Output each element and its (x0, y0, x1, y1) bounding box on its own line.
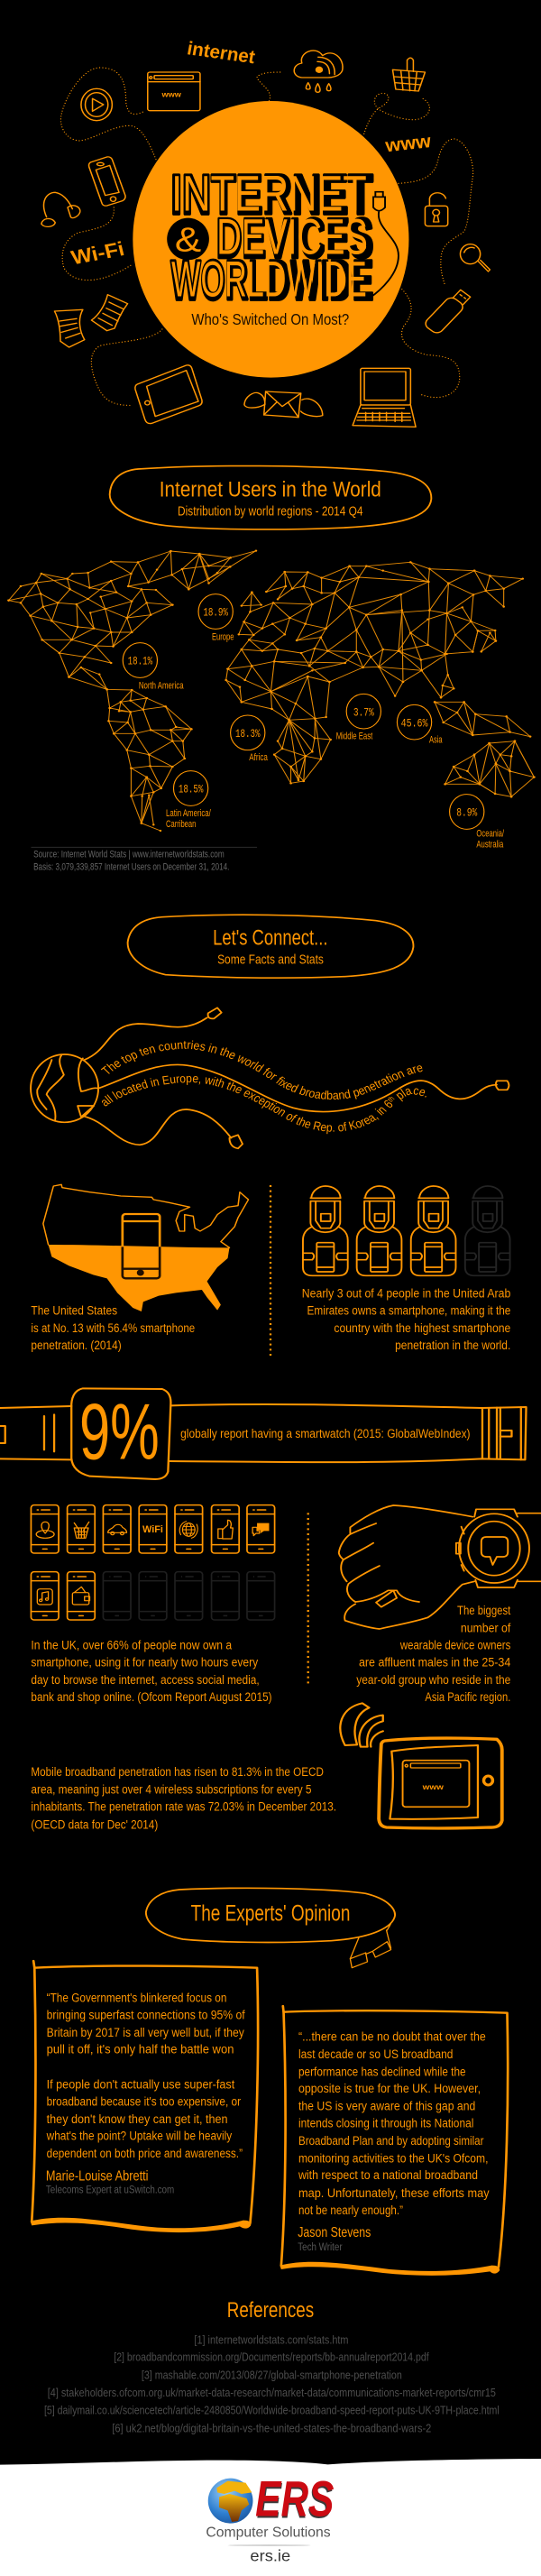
stat: Asia (397, 704, 443, 745)
quote panel: Jason Stevens: “...there can be no doubt that over the (298, 2030, 486, 2044)
phone grid: active phones (31, 1505, 275, 1620)
source note: Source: Internet World Stats | www.internetworldstats.com (33, 848, 225, 860)
stat: Africa: Africa (249, 751, 268, 763)
phone icon: chat (252, 1523, 269, 1536)
references list (44, 2333, 500, 2434)
quote panel: Jason Stevens (280, 2006, 508, 2276)
references list: [6] uk2.net/blog/digital-britain-vs-the-united-states-the-broadband-wars-2 (112, 2422, 431, 2434)
US fact text: is at No. 13 with 56.4% smartphone (31, 1321, 195, 1336)
quote panel: Jason Stevens: opposite is true for the UK. However, (298, 2082, 481, 2096)
stat: Middle East: 3.7% (353, 707, 374, 720)
stat: Asia: 45.6% (401, 718, 428, 731)
icon: browser window: www (160, 90, 181, 98)
icon: wifi tablet (340, 1703, 502, 1828)
icon: browser window (148, 72, 200, 111)
source note (31, 847, 257, 872)
wearable fact text (356, 1604, 511, 1705)
stat: Oceania: Oceania/ (476, 827, 504, 839)
quote panel: Jason Stevens: map. Unfortunately, these efforts may (298, 2186, 490, 2201)
phone icon: thumbs up (218, 1520, 233, 1539)
smartwatch strap 9%: 9% (79, 1388, 160, 1477)
title: Internet & Devices Worldwide: DEVICES (216, 208, 373, 270)
quote panel: Marie-Louise Abretti: Telecoms Expert at uSwitch.com (46, 2184, 174, 2195)
US fact text: penetration. (2014) (31, 1339, 122, 1353)
quote panel: Jason Stevens: with respect to a national broadband (298, 2168, 478, 2183)
white footer band (0, 2459, 541, 2576)
curved fact text: th (388, 1097, 395, 1102)
heading pill: experts' opinion (146, 1888, 395, 1942)
map: Eurasia (239, 562, 523, 697)
stat: Asia: Asia (429, 733, 443, 745)
UK fact text: day to browse the internet, access social media, (31, 1673, 260, 1688)
quote panel: Jason Stevens: Tech Writer (298, 2240, 343, 2253)
icon: smartphone (89, 157, 125, 206)
US fact text (31, 1304, 195, 1353)
heading pill: let's connect: Some Facts and Stats (217, 952, 324, 967)
icon row: UAE figures (303, 1186, 510, 1275)
hero section (41, 38, 490, 427)
references list: [3] mashable.com/2013/08/27/global-smartphone-penetration (142, 2369, 402, 2381)
UK fact text: In the UK, over 66% of people now own a (31, 1638, 233, 1652)
icon: rss cloud (294, 51, 343, 92)
stat: Africa (231, 715, 268, 763)
icon: magnifier (460, 244, 490, 271)
label: internet: internet (186, 38, 257, 68)
quote panel: Jason Stevens: performance has declined while the (298, 2065, 466, 2079)
logo: ERS wordmark: ERS (257, 2471, 333, 2528)
heading pill: internet users: Distribution by world regions - 2014 Q4 (178, 505, 363, 519)
heading pill: internet users: Internet Users in the World (160, 478, 381, 501)
title: Internet & Devices Worldwide: INTERNET (170, 164, 373, 226)
references and footer (0, 2299, 541, 2576)
icon: shopping basket (392, 58, 425, 91)
quote panel: Marie-Louise Abretti: bringing superfast connections to 95% of (47, 2009, 245, 2022)
logo: ERS globe (208, 2479, 252, 2524)
stat: Middle East (336, 694, 381, 741)
icon: globe with cables (31, 1007, 509, 1148)
icon: usb stick (423, 288, 472, 336)
icon: tablet (135, 365, 202, 424)
stat: North America: 18.1% (128, 656, 153, 668)
orange circle (133, 101, 408, 378)
heading pill: let's connect (128, 915, 413, 978)
experts section (31, 1888, 508, 2276)
icon: laptop (353, 368, 416, 427)
facts section (30, 914, 510, 1356)
quote panel: Jason Stevens: the US is very aware of this gap and (298, 2099, 475, 2113)
icon: headphones (41, 192, 80, 226)
phone icon: music (37, 1589, 52, 1605)
quote panel: Marie-Louise Abretti (31, 1961, 258, 2232)
quote panel: Marie-Louise Abretti: Marie-Louise Abretti (46, 2168, 149, 2184)
map: South America (107, 689, 191, 831)
logo: ERS wordmark (255, 2470, 334, 2528)
title: Internet & Devices Worldwide: DEVICES (216, 208, 368, 265)
label: www: www (383, 130, 433, 156)
phone icon: car (108, 1524, 126, 1535)
icon: wifi tablet: www (422, 1783, 445, 1791)
stat: Europe (198, 594, 234, 642)
curved fact text: place. (396, 1088, 426, 1102)
phone icon: location pin (36, 1522, 54, 1538)
map: Africa (226, 649, 363, 783)
UK fact text: smartphone, using it for nearly two hours every (31, 1656, 259, 1670)
references heading: References (227, 2299, 314, 2323)
heading pill: internet users (110, 466, 431, 529)
map: North America (9, 551, 256, 689)
phone grid: inactive phones (103, 1572, 275, 1620)
quote panel: Marie-Louise Abretti: what's the point? Uptake will be heavily (46, 2130, 233, 2143)
quote panel: Marie-Louise Abretti: Britain by 2017 is all very well but, if they (47, 2026, 244, 2040)
subtitle: Who's Switched On Most? (191, 310, 349, 329)
quote panel: Marie-Louise Abretti: pull it off, it's only half the battle won (47, 2043, 234, 2056)
title: Internet & Devices Worldwide (167, 164, 373, 312)
mobile broadband text: Mobile broadband penetration has risen to 81.3% in the OECD (31, 1765, 324, 1780)
phone icon: wifi: WiFi (142, 1523, 163, 1535)
mobile broadband text (31, 1765, 336, 1832)
icon: play button (81, 88, 112, 121)
quote panel: Marie-Louise Abretti: broadband because it's too expensive, or (47, 2095, 241, 2109)
stat: North America: North America (139, 679, 184, 691)
logo: Computer Solutions: Computer Solutions (206, 2525, 331, 2540)
dotted divider (306, 1513, 311, 1686)
stat: Africa: 18.3% (235, 729, 261, 741)
dotted divider (268, 1185, 273, 1357)
logo divider (228, 2544, 310, 2546)
world map section (9, 466, 534, 872)
phone icon: wallet (72, 1587, 89, 1605)
heading pill: experts' opinion: The Experts' Opinion (191, 1900, 350, 1926)
quote panel: Jason Stevens: last decade or so US broadband (298, 2047, 453, 2062)
icon: papers (54, 295, 128, 347)
quote panel: Jason Stevens: intends closing it through its National (298, 2117, 473, 2130)
icon: padlock (425, 193, 448, 226)
phone icon: basket (74, 1522, 89, 1538)
mobile broadband text: inhabitants. The penetration rate was 72.03% in December 2013. (31, 1799, 336, 1814)
stat: Europe: 18.9% (203, 607, 228, 620)
curved fact text: all located in Europe, with the exception of the Rep. of Korea, in 6 (102, 1075, 393, 1135)
stat: Latin America (166, 771, 211, 830)
heading pill: let's connect: Let's Connect... (213, 926, 328, 950)
stat: Middle East: Middle East (336, 730, 373, 741)
US map with phone (43, 1184, 249, 1311)
quote panel: Jason Stevens: Jason Stevens (298, 2225, 371, 2240)
logo: site url: ers.ie (250, 2547, 290, 2565)
stat: Latin America: Latin America/ (166, 807, 211, 819)
stat: Latin America: 18.5% (179, 784, 204, 796)
stat: Latin America: Carribean (166, 818, 196, 830)
mobile broadband text: (OECD data for Dec' 2014) (31, 1817, 158, 1832)
stat: Europe: Europe (212, 630, 234, 642)
stat: Oceania: Australia (476, 838, 503, 850)
icon: glasses (350, 1924, 391, 1968)
mobile broadband text: area, meaning just over 4 wireless subscriptions for every 5 (31, 1782, 312, 1797)
title: Internet & Devices Worldwide: WORLDWIDE (171, 250, 367, 307)
references list: [1] internetworldstats.com/stats.htm (194, 2333, 348, 2346)
quote panel: Marie-Louise Abretti: dependent on both price and awareness.” (47, 2147, 243, 2161)
US fact text: The United States (31, 1304, 117, 1318)
devices section (0, 1388, 541, 1832)
label: wi-fi: Wi-Fi (69, 238, 126, 270)
UK fact text (31, 1638, 272, 1705)
logo: ERS wordmark: ERS (255, 2470, 334, 2526)
UAE fact text (302, 1286, 510, 1353)
curved fact text (101, 1041, 426, 1135)
dotted connectors (60, 68, 473, 405)
references list: [2] broadbandcommission.org/Documents/reports/bb-annualreport2014.pdf (114, 2351, 429, 2363)
quote panel: Marie-Louise Abretti: If people don't actually use super-fast (47, 2077, 235, 2092)
wearable fact text: number of (461, 1621, 511, 1635)
quote panel: Marie-Louise Abretti: “The Government's blinkered focus on (47, 1991, 226, 2005)
title: Internet & Devices Worldwide: & (175, 220, 201, 259)
illustration: hand with smartwatch (339, 1505, 541, 1629)
stat: Oceania: 8.9% (456, 807, 478, 820)
stat: North America (123, 643, 184, 691)
smartwatch strap 9% (0, 1388, 527, 1479)
wearable fact text: The biggest (457, 1604, 511, 1618)
title: Internet & Devices Worldwide: INTERNET (171, 164, 367, 221)
plug cable (369, 192, 399, 299)
quote panel: Jason Stevens: not be nearly enough.” (298, 2203, 403, 2218)
icon: winged envelope (244, 391, 323, 418)
map: Indonesia and Australia (435, 702, 534, 796)
UK fact text: bank and shop online. (Ofcom Report August 2015) (31, 1690, 272, 1705)
curved fact text: The top ten countries in the world for fixed broadband penetration are (101, 1041, 423, 1100)
source note: Basis: 3,079,339,857 Internet Users on December 31, 2014. (33, 860, 229, 872)
phone icon: globe (179, 1522, 197, 1538)
stat: Oceania (450, 795, 504, 850)
quote panel: Marie-Louise Abretti: they don't know they can get it, then (47, 2112, 228, 2127)
